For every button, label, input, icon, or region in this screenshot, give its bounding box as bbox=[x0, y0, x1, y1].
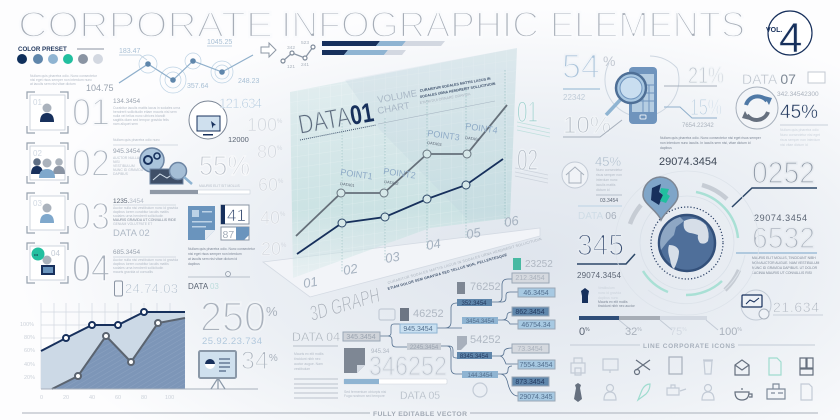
card 03: Auctor nulla nisi vestibulum nunc id gravida bbox=[113, 206, 178, 210]
data 04 block: Mauris ex elit mollis bbox=[294, 352, 324, 356]
vertical percent axis: % bbox=[277, 119, 283, 125]
card 03 bbox=[27, 193, 178, 239]
3D chart point labels: DATA02 bbox=[384, 179, 400, 186]
title bbox=[18, 4, 745, 45]
250 percent: 25.92.23.734 bbox=[202, 336, 262, 347]
center paragraph bbox=[660, 136, 762, 150]
vertical percent axis: % bbox=[277, 146, 283, 152]
mini network chart: 342 bbox=[287, 45, 295, 51]
phone magnifier infographic bbox=[562, 48, 724, 139]
phone magnifier infographic: 22342 bbox=[563, 93, 586, 102]
timeline bar: 32 bbox=[625, 326, 637, 338]
intro text: Nullam quis pharetra odio. Nunc consectetur bbox=[30, 74, 98, 78]
house data 06: risus semper non bbox=[596, 173, 622, 177]
data 04 block: vestibulum bbox=[294, 367, 310, 371]
icon: figure with text: dapibus nunc bbox=[598, 296, 618, 300]
flow chart values: 46252 bbox=[413, 308, 444, 320]
callout numbers: 0252 bbox=[752, 155, 815, 190]
data 07 panel: nisi vitae dictum id bbox=[780, 143, 808, 147]
flow chart boxes: 2245.3454 bbox=[410, 345, 439, 351]
data 07 panel: 342.34542300 bbox=[777, 91, 819, 98]
card 01: 01 bbox=[33, 98, 42, 107]
timeline bar: % bbox=[682, 327, 687, 333]
card 04: ••• bbox=[34, 252, 39, 257]
flow chart boxes: 29074.345 bbox=[519, 394, 553, 401]
monitor icon and stat: 121.634 bbox=[219, 96, 262, 111]
color preset bbox=[17, 46, 104, 64]
card 03: MAURIS GRAVIDA UT CONVALLIS RIDE bbox=[113, 218, 177, 222]
card 01: 01 bbox=[72, 92, 110, 134]
card 02: VESTIBULUM bbox=[113, 164, 135, 168]
icon: figure with text bbox=[581, 286, 636, 308]
presentation board icon bbox=[199, 351, 236, 389]
timeline bar: % bbox=[737, 327, 742, 333]
flow chart values: 23252 bbox=[525, 259, 553, 270]
3D chart heading: CURABITUR SODALES MATTIS LACUS IN bbox=[419, 77, 491, 93]
card 02 bbox=[27, 143, 144, 185]
data 05 block bbox=[344, 348, 447, 402]
flow chart values: 54252 bbox=[470, 334, 501, 346]
paragraph: at iaculis sem nisi vitae dictum id bbox=[188, 257, 237, 261]
callout numbers: NON AUCTOR AUGUE. NAM VESTIBULUM bbox=[752, 261, 820, 265]
icon: figure with text: Mauris ex elit mollis bbox=[598, 300, 628, 304]
3D chart point labels: POINT3 bbox=[427, 128, 460, 143]
data 05 block: 945.34 bbox=[371, 349, 390, 355]
timeline bar: % bbox=[637, 327, 642, 333]
area chart: 20 bbox=[63, 395, 69, 401]
data 04 block: tincidunt nibh nec bbox=[294, 357, 321, 361]
3D chart x labels: 03 bbox=[384, 249, 402, 266]
34 percent: 34 bbox=[241, 347, 269, 375]
card 04 bbox=[27, 243, 178, 290]
3D chart point labels: DATA03 bbox=[427, 140, 443, 147]
card 02: 02 bbox=[72, 143, 110, 185]
34 percent: % bbox=[269, 353, 278, 364]
3D chart point labels: POINT1 bbox=[340, 167, 373, 182]
mini network chart: 121 bbox=[287, 64, 295, 70]
title: CORPORATE bbox=[18, 4, 273, 45]
area chart: 60 bbox=[115, 395, 121, 401]
area chart: 40% bbox=[24, 362, 35, 368]
3D chart heading: VOLUME bbox=[377, 88, 418, 106]
area chart: 100% bbox=[20, 322, 34, 328]
3D chart x labels: 06 bbox=[503, 213, 521, 230]
3D chart x labels bbox=[302, 213, 521, 291]
paragraph: Nullam quis pharetra odio. Nunc consectetur bbox=[188, 247, 256, 251]
icon: figure with text: Vestibulum bbox=[598, 286, 615, 290]
volume badge: VOL. bbox=[766, 27, 782, 34]
phone magnifier infographic: % bbox=[603, 53, 615, 69]
phone magnifier infographic: 7654.22342 bbox=[682, 123, 714, 129]
vertical percent axis: 40 bbox=[260, 208, 280, 228]
55 percent with progress bar: 55% bbox=[199, 150, 250, 181]
flow chart boxes: 73.3454 bbox=[517, 346, 543, 353]
document and number tiles bbox=[188, 205, 249, 241]
card 02: NISI bbox=[113, 160, 120, 164]
card 04: 685.3454 bbox=[113, 249, 140, 256]
card 02: DAPIBUS bbox=[113, 172, 129, 176]
3D chart point labels: DATA01 bbox=[340, 181, 356, 188]
3D graph title: ETIAM DOLOR SEM GRAVIDA SED TELLUS NON, PELLENTESQUE bbox=[387, 253, 508, 291]
mini network chart bbox=[281, 40, 315, 70]
250 percent: % bbox=[266, 304, 278, 319]
card 02: AUCTOR NULLA bbox=[113, 156, 140, 160]
icon: figure with text: tincidunt nibh nec auctor bbox=[598, 304, 636, 308]
data 07 panel bbox=[736, 71, 828, 147]
flow chart boxes: 873.3454 bbox=[515, 379, 545, 386]
title: ELEMENTS bbox=[550, 4, 745, 45]
mini network chart: 241 bbox=[301, 62, 309, 68]
data 05 block: 346252 bbox=[369, 351, 447, 381]
card 04: 04 bbox=[51, 249, 60, 258]
house data 06: interdum nunc bbox=[596, 178, 618, 182]
side labels 01 02 bbox=[515, 96, 550, 183]
3D chart point labels: POINT4 bbox=[465, 121, 498, 136]
card 01: hendrerit sollicitudin etiam mauris nisl sem bbox=[113, 110, 177, 114]
3D graph title: CURABITUR SODALES MATTIS LACUS IN SODALES URNA HENDRERIT SOLLICITUDIN bbox=[387, 237, 542, 285]
area chart: 40 bbox=[89, 395, 95, 401]
3D chart heading bbox=[296, 77, 496, 140]
timeline bar bbox=[579, 316, 742, 338]
area chart: 60% bbox=[24, 348, 35, 354]
card 03: 1235.3454 bbox=[113, 198, 144, 205]
icon: figure with text: nunc id gravida bbox=[598, 291, 621, 295]
intro text bbox=[30, 74, 114, 93]
house data 06: Nunc consectetur bbox=[596, 168, 623, 172]
chart clock icon and 21.634 bbox=[741, 290, 823, 320]
area chart: 80% bbox=[24, 335, 35, 341]
flow chart boxes: 212.3454 bbox=[515, 275, 545, 282]
side labels 01 02: 02 bbox=[517, 144, 538, 177]
area chart: 80 bbox=[141, 395, 147, 401]
gears analytics icon bbox=[140, 148, 192, 184]
card 01: 134.3454 bbox=[113, 98, 140, 105]
3D floor bbox=[263, 228, 540, 297]
3D chart heading: DATA01 bbox=[296, 97, 376, 140]
monitor icon and stat bbox=[189, 96, 262, 144]
phone magnifier infographic: 21% bbox=[688, 62, 724, 88]
3D chart heading: ETIAM DUI ORNARE GRAVIDA bbox=[419, 92, 471, 105]
phone magnifier infographic: 10% bbox=[563, 112, 611, 139]
house data 06: 03.3454 bbox=[600, 198, 618, 204]
flow chart boxes: 8345.3454 bbox=[460, 354, 489, 360]
card 04: mauris gravida ut convallis bbox=[113, 270, 153, 274]
intro text: 104.75 bbox=[86, 83, 114, 93]
flow chart values: 76252 bbox=[470, 281, 501, 293]
card 01 bbox=[27, 92, 180, 145]
data 04 block: auctor augue. Nam bbox=[294, 362, 323, 366]
3D chart x labels: 01 bbox=[302, 274, 319, 291]
data 07 panel: Nunc consectetur nisi eget bbox=[780, 133, 820, 137]
3D chart heading: SODALES URNA HENDRERIT SOLLICITUDIN bbox=[419, 82, 496, 99]
flow chart boxes bbox=[343, 273, 555, 401]
vertical percent axis: % bbox=[281, 243, 287, 249]
card 03: GENIAM VOLUTPATE ET bbox=[113, 222, 152, 226]
intro text: nisi eget risus semper non interdum nunc bbox=[30, 78, 92, 82]
3D chart lines bbox=[296, 105, 507, 254]
icon row 1 bbox=[571, 357, 813, 375]
line chart top: 357.64 bbox=[187, 83, 209, 90]
timeline bar: 100 bbox=[719, 326, 737, 338]
card 04: 04 bbox=[72, 248, 110, 290]
house data 06: iaculis mattis bbox=[596, 183, 616, 187]
document and number tiles: 87 bbox=[222, 229, 234, 241]
data 05 block: DATA 05 bbox=[400, 390, 440, 402]
55 percent with progress bar bbox=[150, 150, 250, 194]
flow chart boxes: 144.3454 bbox=[467, 373, 493, 379]
card 03: DATA 02 bbox=[113, 228, 150, 239]
flow chart boxes: 3454.3454 bbox=[466, 319, 495, 325]
callout numbers: 345 bbox=[577, 229, 624, 262]
timeline bar: 0 bbox=[579, 326, 585, 338]
card 02: 945.3454 bbox=[113, 148, 140, 155]
line chart top: 1045.25 bbox=[207, 39, 232, 46]
card 01: Curabitur iaculis mattis lacus in sodales urna bbox=[113, 106, 180, 110]
line chart top: 248.23 bbox=[238, 78, 260, 85]
3D chart x labels: 04 bbox=[425, 236, 442, 253]
document and number tiles: 41 bbox=[227, 206, 246, 225]
card 01: Nullam quis pharetra odio nunc bbox=[113, 138, 160, 142]
footer rule: FULLY EDITABLE VECTOR bbox=[373, 411, 467, 418]
250 percent: 250 bbox=[200, 293, 266, 340]
flow chart boxes: 352.3454 bbox=[461, 301, 487, 307]
area chart: 20% bbox=[24, 375, 35, 381]
intro text: at iaculis sem nisi vitae dictum bbox=[30, 82, 76, 86]
3D graph title: 3D GRAPH bbox=[307, 284, 383, 326]
flow chart boxes: 46.3454 bbox=[523, 290, 549, 297]
paragraph: dapibus bbox=[188, 262, 200, 266]
card 03: dapibus lorem curabitur iaculis mattis bbox=[113, 210, 169, 214]
55 percent with progress bar: MAURIS ELIT SIT MOLLIS bbox=[199, 184, 241, 188]
vertical percent axis: 60 bbox=[258, 175, 278, 195]
center paragraph: Nullam quis pharetra odio. Nunc consectetur nisi eget risus semper bbox=[660, 136, 762, 140]
3D chart heading: CHART bbox=[377, 100, 411, 117]
color preset: COLOR PRESET bbox=[18, 46, 67, 53]
vertical percent axis: % bbox=[280, 212, 286, 218]
area chart bbox=[20, 303, 258, 401]
side labels 01 02: 01 bbox=[517, 96, 538, 129]
card 02: 02 bbox=[33, 149, 42, 158]
callout numbers: 29074.3454 bbox=[577, 271, 622, 280]
vertical percent axis: % bbox=[278, 179, 284, 185]
callout numbers: LACINIA MAURIS UT CONVALLIS RISI bbox=[752, 271, 812, 275]
card 03: 03 bbox=[33, 199, 42, 208]
3D glass panel bbox=[290, 48, 517, 278]
volume badge: 4 bbox=[779, 14, 802, 61]
map pin bbox=[643, 177, 678, 220]
3D graph title bbox=[307, 237, 542, 326]
vertical percent axis: 100 bbox=[247, 115, 277, 135]
callout numbers: 29074.3454 bbox=[754, 213, 807, 223]
3D chart point labels: DATA04 bbox=[465, 135, 481, 142]
card 03: sodales urna hendrerit sollicitudin bbox=[113, 214, 163, 218]
callout numbers bbox=[577, 155, 820, 280]
title: INFOGRAPHIC bbox=[281, 4, 539, 45]
center paragraph: dapibus bbox=[660, 146, 672, 150]
icon: refresh bbox=[736, 87, 778, 129]
data 07 panel: risus semper non interdum bbox=[780, 138, 820, 142]
callout numbers: MAURIS ELIT MOLLIS, TINCIDUNT NIBH bbox=[752, 256, 816, 260]
flow chart values bbox=[379, 258, 553, 397]
stacked slanted bars bbox=[322, 41, 445, 55]
vertical percent axis: 80 bbox=[257, 142, 277, 162]
3D chart x labels: 02 bbox=[342, 261, 360, 278]
flow chart boxes: 7554.3454 bbox=[519, 362, 553, 369]
area chart: 100 bbox=[165, 395, 174, 401]
line chart top: 183.47 bbox=[119, 48, 141, 55]
house data 06 bbox=[562, 154, 623, 222]
line chart top bbox=[119, 39, 260, 93]
section heading: line corporate icons: LINE CORPORATE ICONS bbox=[643, 343, 736, 350]
3D chart x labels: 05 bbox=[465, 225, 483, 242]
center paragraph: non interdum nunc iaculis. In iaculis sem nisi, vitae dictum id bbox=[660, 141, 751, 145]
callout numbers: 29074.3454 bbox=[659, 156, 717, 168]
phone magnifier infographic: 54 bbox=[562, 48, 600, 86]
flow chart boxes: 862.3454 bbox=[515, 309, 545, 316]
house data 06: dictum id bbox=[596, 188, 610, 192]
3D chart point labels: POINT2 bbox=[383, 166, 416, 181]
flow chart boxes: 46754.34 bbox=[521, 322, 551, 329]
callout numbers: 6532 bbox=[752, 222, 815, 255]
timeline bar: 75 bbox=[670, 326, 682, 338]
card 04: sodales urna hendrerit sollicitudin bbox=[113, 266, 163, 270]
data 04 block: DATA 04 bbox=[292, 330, 340, 344]
house data 06: 45% bbox=[595, 154, 621, 169]
paragraph bbox=[188, 247, 256, 277]
flow chart boxes: 345.3454 bbox=[346, 334, 376, 341]
data 05 block: Sed fermentum obturpis nisi bbox=[344, 390, 386, 394]
card 01: nam aliquet sem bbox=[113, 122, 138, 126]
card 04: Auctor nulla nisi vestibulum nunc id gravida bbox=[113, 258, 178, 262]
data 04 block bbox=[292, 330, 340, 398]
phone and date: 24.74.03 bbox=[125, 281, 178, 296]
icon row 2 bbox=[574, 383, 812, 402]
callout numbers: NUNC ID GRAVIDA DAPIBUS. UT DOLOR bbox=[752, 266, 818, 270]
chart clock icon and 21.634: 21.634 bbox=[773, 299, 819, 315]
mini network chart: 523 bbox=[301, 40, 309, 46]
data 05 block: Fuga nostrum sed tempore bbox=[344, 394, 385, 398]
flow chart boxes: 945.3454 bbox=[403, 326, 433, 333]
volume badge bbox=[766, 11, 812, 61]
monitor icon and stat: 12000 bbox=[228, 135, 249, 144]
timeline bar: % bbox=[585, 327, 590, 333]
area chart: 0 bbox=[40, 395, 43, 401]
data 07 panel: 45% bbox=[780, 102, 818, 123]
card 01: sagittis diam sed tempor gravida felis bbox=[113, 118, 169, 122]
data 07 panel: DATA 07 bbox=[742, 71, 796, 87]
paragraph: nisi eget risus semper non interdum bbox=[188, 252, 242, 256]
card 02: NUNC ID GRAVIDA bbox=[113, 168, 144, 172]
vertical percent axis bbox=[247, 115, 287, 259]
house data 06: DATA 06 bbox=[578, 211, 617, 222]
card 04: dapibus lorem curabitur iaculis mattis bbox=[113, 262, 169, 266]
vertical percent axis: 20 bbox=[261, 239, 281, 259]
phone magnifier infographic: 15% bbox=[690, 94, 722, 120]
card 01: nulla vel tellus nunc ultrices blandit bbox=[113, 114, 165, 118]
3D chart point labels bbox=[340, 121, 498, 188]
globe radial diagram bbox=[615, 171, 759, 315]
flow chart connectors bbox=[380, 279, 518, 396]
data 07 panel: Nullam quis pharetra odio bbox=[780, 128, 819, 132]
outline arrow bbox=[261, 43, 276, 57]
data 03 label: DATA 03 bbox=[188, 282, 219, 291]
card 03: 03 bbox=[72, 196, 110, 238]
